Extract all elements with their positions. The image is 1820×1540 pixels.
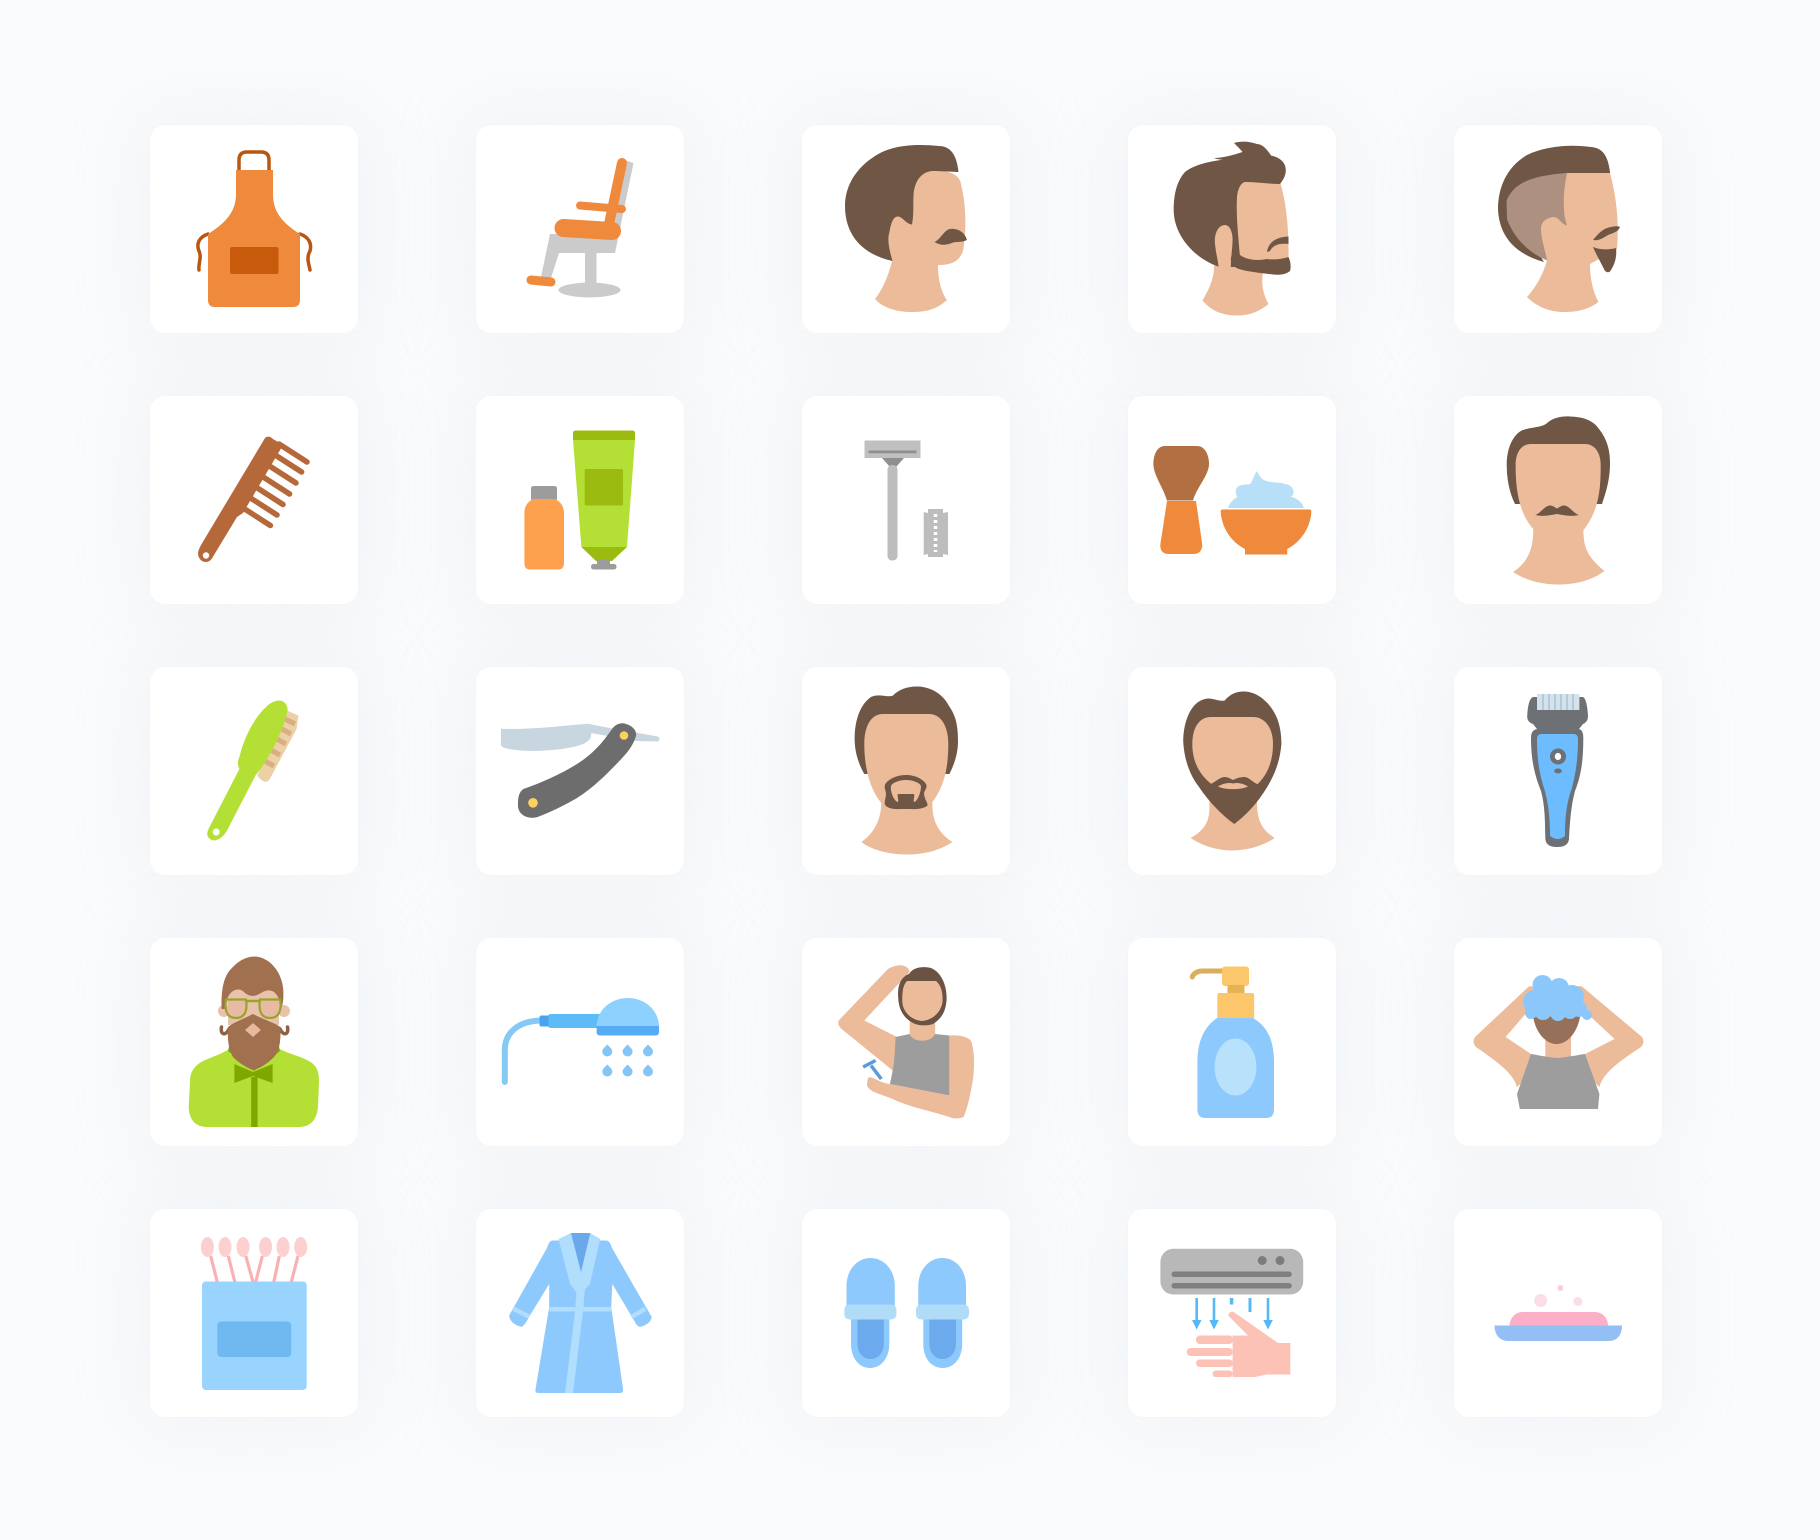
icon: cotton swabs: [200, 1236, 307, 1390]
icon: barber chair: [530, 160, 633, 297]
icon: apron: [197, 152, 310, 306]
icon: pump bottle: [1192, 966, 1274, 1118]
card: cotton swabs box: [148, 1208, 358, 1418]
icon: side head with full beard: [1173, 141, 1290, 315]
card: comb: [148, 394, 358, 604]
card: man with beard, side view: [1126, 124, 1336, 334]
icon: shower head: [504, 998, 658, 1082]
icon: side head with moustache: [844, 145, 966, 312]
card: electric trimmer: [1452, 666, 1662, 876]
card: hipster barber: [148, 936, 358, 1146]
icon: safety razor: [864, 440, 948, 560]
icon: soap on dish: [1494, 1284, 1622, 1340]
card: hair brush: [148, 666, 358, 876]
card: front head with moustache: [1452, 394, 1662, 604]
card: shower head: [474, 936, 684, 1146]
icon: air arrows: [1192, 1298, 1272, 1329]
icon: left slipper: [844, 1258, 896, 1368]
icon: shampoo foam: [1522, 974, 1592, 1020]
icon: shaving brush: [1153, 446, 1208, 554]
icon: front head with full beard: [1183, 691, 1281, 850]
icon: bathrobe: [509, 1232, 651, 1392]
icon: bowl of foam: [1220, 470, 1311, 554]
icon: man washing hair: [1473, 974, 1643, 1108]
card: safety razor and blade: [800, 394, 1010, 604]
icon: hair brush: [207, 700, 298, 840]
icon: front head with goatee: [854, 686, 958, 854]
card: straight razor: [474, 666, 684, 876]
card: shaving brush and foam bowl: [1126, 394, 1336, 604]
card: pump bottle: [1126, 936, 1336, 1146]
card: soap dish: [1452, 1208, 1662, 1418]
card: man with undercut, side view: [1452, 124, 1662, 334]
card: apron: [148, 124, 358, 334]
card: front head with full beard: [1126, 666, 1336, 876]
icon: electric trimmer: [1527, 694, 1588, 846]
card: hand dryer: [1126, 1208, 1336, 1418]
card: barber chair: [474, 124, 684, 334]
icon: water drops: [602, 1044, 652, 1076]
card: slippers: [800, 1208, 1010, 1418]
icon: hand: [1186, 1311, 1290, 1376]
card: man washing hair: [1452, 936, 1662, 1146]
icon: man shaving armpit: [838, 965, 974, 1118]
card: man with moustache, side view: [800, 124, 1010, 334]
icon: front head with moustache: [1506, 416, 1610, 584]
card: front head with goatee: [800, 666, 1010, 876]
icon: straight razor: [500, 723, 659, 817]
icon: side head with undercut and goatee: [1498, 145, 1620, 312]
card: bottle and tube: [474, 394, 684, 604]
card: bathrobe: [474, 1208, 684, 1418]
card: man shaving armpit: [800, 936, 1010, 1146]
icon: hand dryer unit: [1160, 1248, 1303, 1294]
icon: comb: [198, 436, 306, 562]
icon: bottle and cream tube: [524, 430, 634, 569]
icon: bearded man with glasses: [188, 956, 318, 1126]
icon: right slipper: [916, 1258, 968, 1368]
